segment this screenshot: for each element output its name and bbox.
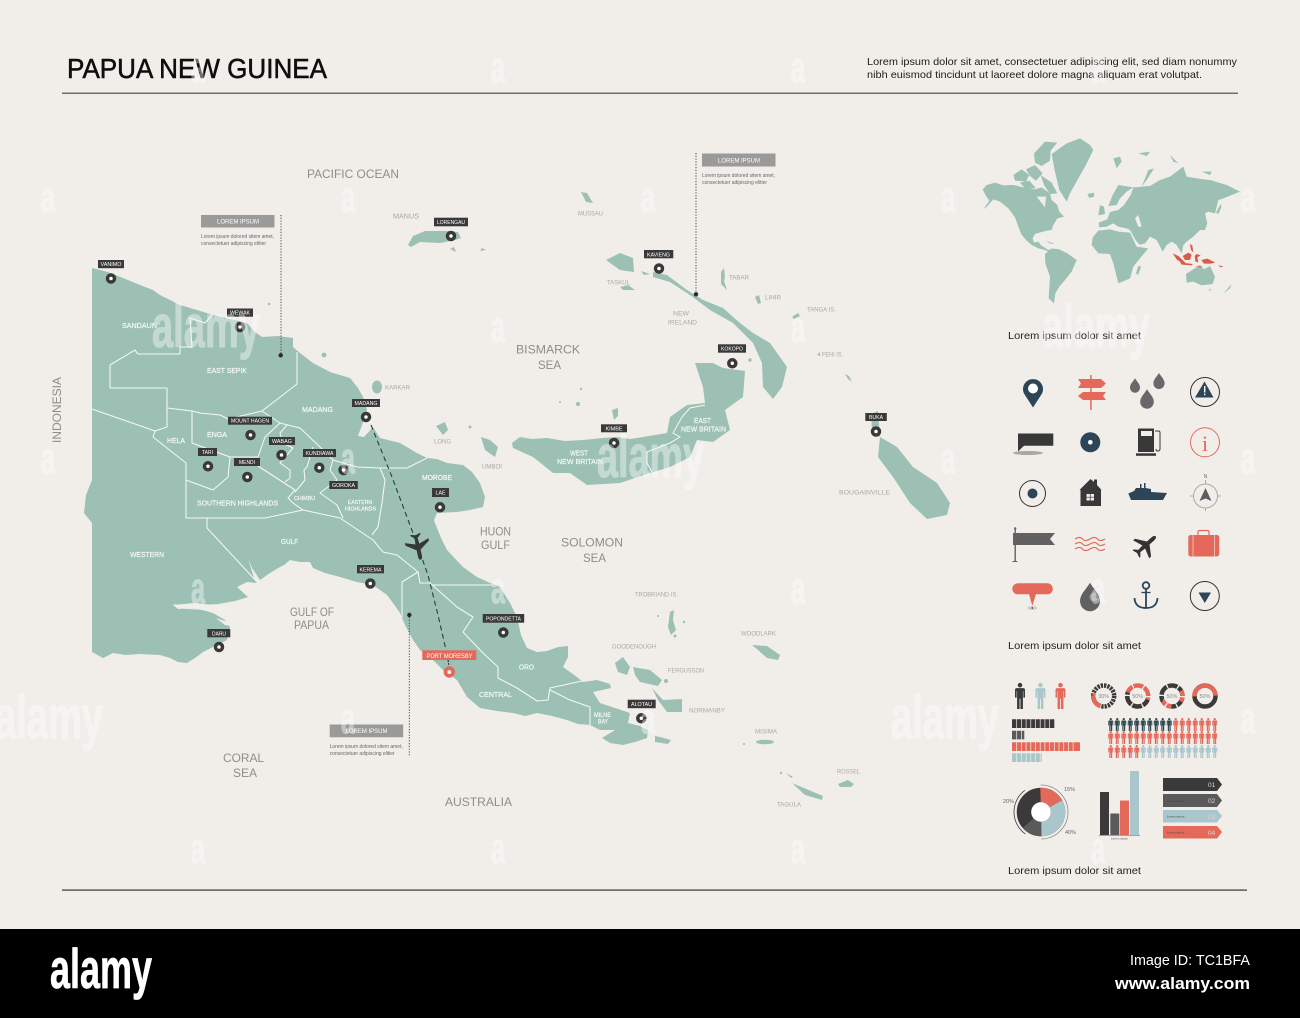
icon: red marker: [1012, 583, 1053, 610]
island labels: WOODLARK: [741, 630, 777, 638]
Buka: BUKA: [869, 415, 883, 421]
icon: flag: [1012, 527, 1055, 562]
sea and neighbour labels: INDONESIA: [50, 377, 64, 443]
Lorengau: [434, 218, 468, 240]
footer bar: [0, 929, 1300, 1018]
watermark: a: [491, 564, 505, 613]
mainland: [84, 268, 648, 745]
statistics panel: [1003, 682, 1222, 840]
caption: icons: Lorem ipsum dolor sit amet: [1008, 640, 1141, 652]
sea and neighbour labels: AUSTRALIA: [445, 795, 512, 809]
Tari: [198, 448, 217, 470]
icon: compass: N: [1204, 474, 1208, 480]
pie chart: 15%: [1064, 787, 1075, 793]
pie chart: [1003, 785, 1076, 839]
watermark: alamy: [891, 684, 999, 751]
island labels: UMBOI: [482, 464, 502, 470]
arrow list: Lorem ipsum: [1167, 814, 1185, 818]
island labels: GOODENOUGH: [612, 644, 656, 650]
callout: New Ireland: [694, 153, 776, 296]
donut: 50 percent red and dark: [1124, 683, 1151, 709]
icon: disc: [1080, 432, 1100, 452]
North America: [983, 183, 1064, 253]
plane on route: [403, 531, 432, 562]
Alotau: ALOTAU: [631, 702, 652, 708]
callout: East Sepik: [201, 215, 283, 357]
watermark: a: [41, 173, 55, 222]
people grid: [1108, 718, 1217, 758]
Madang: MADANG: [354, 401, 378, 407]
island labels: NORMANBY: [689, 708, 726, 714]
Lorengau: LORENGAU: [437, 220, 465, 226]
watermark: a: [941, 434, 955, 483]
island labels: FENI IS.: [822, 352, 843, 358]
watermark: a: [1241, 173, 1255, 222]
province labels: MILNE: [594, 713, 611, 719]
segmented bars: [1012, 718, 1080, 763]
arrow list: 03: [1208, 814, 1216, 821]
sea and neighbour labels: CORAL: [223, 751, 264, 765]
intro text: [867, 56, 1238, 81]
icon: oil drop: [1080, 583, 1100, 611]
Wewak: WEWAK: [230, 311, 250, 317]
icon: house: [1080, 479, 1102, 506]
Bougainville and Buka: [871, 411, 950, 519]
icon: plane: [1128, 527, 1164, 563]
sea and neighbour labels: SEA: [233, 766, 257, 780]
sea and neighbour labels: SEA: [583, 551, 606, 565]
footer bar: www.alamy.com: [1114, 974, 1250, 993]
province labels: GULF: [281, 539, 298, 546]
Port Moresby capital: [422, 650, 476, 676]
Goroka: [329, 466, 358, 489]
Buka: [865, 413, 887, 435]
Kavieng: KAVIENG: [647, 252, 670, 258]
island labels: MANUS: [393, 214, 419, 220]
caption: world map: Lorem ipsum dolor sit amet: [1008, 330, 1141, 342]
Australia: [1186, 265, 1215, 285]
watermark: a: [491, 824, 505, 873]
British Isles: [1098, 205, 1105, 215]
province labels: MADANG: [302, 407, 333, 414]
footer bar: alamy: [50, 937, 152, 1000]
sea and neighbour labels: SOLOMON: [561, 536, 623, 550]
island labels: LONG: [434, 438, 451, 446]
Arctic islands: [1113, 157, 1122, 168]
intro text: nibh euismod tincidunt ut laoreet dolore magna aliquam erat volutpat.: [867, 69, 1202, 81]
Wewak: [227, 308, 253, 330]
arrow list: Lorem ipsum: [1167, 830, 1185, 834]
watermark: alamy: [1042, 293, 1150, 360]
title: PAPUA NEW GUINEA: [67, 53, 328, 84]
Kokopo: KOKOPO: [721, 347, 744, 353]
province labels: NEW BRITAIN: [557, 459, 603, 466]
donut: 50 percent half: [1194, 685, 1216, 707]
Mendi: [234, 458, 260, 480]
island labels: TASKUL: [607, 280, 630, 286]
New Britain border: [647, 405, 705, 472]
arrow list: 04: [1208, 830, 1216, 837]
watermark: alamy: [152, 293, 260, 360]
Alotau: [628, 700, 656, 722]
Caribbean: [1046, 241, 1055, 244]
caption: statistics: Lorem ipsum dolor sit amet: [1008, 865, 1141, 877]
island labels: MUSSAU: [578, 210, 603, 218]
province labels: SOUTHERN HIGHLANDS: [197, 500, 278, 508]
province labels: ORO: [519, 664, 535, 672]
watermark: a: [341, 173, 355, 222]
Africa: [1092, 229, 1148, 283]
icon: fuel pump: [1136, 428, 1160, 456]
watermark: a: [791, 303, 805, 352]
sea and neighbour labels: PAPUA: [294, 618, 329, 632]
route: dashed flight path: [371, 425, 446, 650]
province borders: [92, 315, 590, 725]
watermark: a: [341, 694, 355, 743]
Mount Hagen: [228, 417, 272, 438]
Kerema: [357, 565, 384, 587]
Eurasia: [1099, 167, 1240, 253]
donut: 50 percent segmented: 50%: [1166, 694, 1178, 700]
pie chart: 40%: [1065, 830, 1076, 836]
callout: Central: LOREM IPSUM: [346, 728, 388, 735]
callout: Central: Lorem ipsum dolored sitem amet,: [330, 744, 403, 750]
New Ireland: [653, 272, 787, 399]
watermark: a: [1241, 434, 1255, 483]
Lae: LAE: [436, 490, 446, 496]
watermark: a: [641, 173, 655, 222]
callout: East Sepik: consectetuer adipiscing elitier: [201, 241, 266, 247]
pie chart: 20%: [1003, 799, 1014, 805]
icon: warning sign: [1190, 378, 1220, 406]
Port Moresby capital: PORT MORESBY: [426, 653, 473, 660]
Wabag: WABAG: [272, 439, 292, 445]
island labels: BOUGAINVILLE: [839, 490, 891, 496]
icon set: [1012, 373, 1221, 611]
watermark: a: [791, 564, 805, 613]
island labels: LIHIR: [765, 294, 781, 302]
people figures: [1015, 683, 1065, 709]
Madagascar: [1136, 266, 1141, 275]
Lae: [432, 488, 449, 511]
Wabag: [269, 437, 295, 458]
watermark: a: [791, 824, 805, 873]
Canadian arctic: [1013, 169, 1029, 182]
province labels: CENTRAL: [479, 692, 512, 699]
Daru: DARU: [212, 631, 226, 637]
province labels: HIGHLANDS: [345, 506, 376, 512]
icon: ship: [1128, 483, 1167, 500]
Kerema: KEREMA: [360, 567, 382, 573]
icon: anchor: [1134, 582, 1158, 608]
Japan: [1216, 204, 1221, 214]
callout: New Ireland: consectetuer adipiscing elitier: [702, 180, 767, 186]
sea and neighbour labels: PACIFIC OCEAN: [307, 167, 399, 181]
province labels: [122, 323, 726, 726]
highlighted region in red: [1173, 244, 1223, 267]
map of Papua New Guinea: [84, 192, 950, 800]
watermark: a: [491, 43, 505, 92]
province labels: HELA: [167, 438, 185, 445]
donut: 50 percent red and dark: 50%: [1132, 694, 1143, 700]
Kokopo: [718, 344, 746, 367]
donut: 30 percent: [1093, 686, 1114, 706]
callout: Central: consectetuer adipiscing elitier: [330, 751, 395, 757]
donut: 50 percent half: 50%: [1199, 694, 1211, 700]
New Britain: [512, 363, 745, 485]
Kimbe: [601, 424, 627, 446]
icon: down arrow: [1190, 582, 1219, 610]
Tari: TARI: [202, 450, 213, 456]
Kavieng: [644, 250, 673, 272]
intro text: Lorem ipsum dolor sit amet, consectetuer adipiscing elit, sed diam nonummy: [867, 56, 1238, 68]
bar chart: Lorem ipsum: [1111, 836, 1129, 840]
watermark: a: [191, 564, 205, 613]
Popondetta: [483, 614, 524, 636]
watermark: a: [641, 694, 655, 743]
island labels: [385, 210, 891, 808]
icon: compass: [1190, 474, 1221, 511]
watermark: [0, 43, 1255, 873]
island labels: KARKAR: [385, 384, 410, 392]
province labels: WESTERN: [130, 552, 164, 559]
province labels: MOROBE: [422, 475, 452, 482]
Mount Hagen: MOUNT HAGEN: [231, 419, 269, 425]
island labels: TABAR: [729, 274, 749, 282]
Vanimo: VANIMO: [100, 262, 122, 268]
Popondetta: POPONDETTA: [486, 616, 521, 622]
bar chart: [1099, 771, 1140, 840]
sea and neighbour labels: BISMARCK: [516, 342, 580, 356]
province labels: EAST: [694, 418, 712, 425]
capital and city markers: [98, 218, 887, 722]
South America: [1045, 248, 1077, 303]
Mendi: MENDI: [239, 460, 255, 466]
sea and neighbour labels: SEA: [538, 358, 561, 372]
world map: [983, 138, 1240, 303]
province labels: CHIMBU: [294, 496, 315, 502]
icon: waves: [1075, 538, 1105, 550]
watermark: a: [1091, 43, 1105, 92]
Daru: [207, 629, 230, 650]
watermark: a: [1241, 694, 1255, 743]
watermark: a: [791, 43, 805, 92]
Kundiawa: [303, 449, 336, 471]
Vanimo: [98, 260, 124, 282]
watermark: a: [1091, 564, 1105, 613]
province labels: EASTERN: [348, 500, 372, 506]
Iceland: [1087, 193, 1094, 198]
icon: suitcase: [1188, 530, 1219, 556]
arrow list: 02: [1208, 798, 1216, 805]
arrow list: Lorem ipsum: [1167, 799, 1185, 803]
Greenland: [1052, 138, 1093, 202]
arrow list: [1163, 778, 1222, 838]
callout: New Ireland: LOREM IPSUM: [718, 157, 760, 164]
Kimbe: KIMBE: [606, 426, 623, 432]
island labels: FERGUSSON: [668, 668, 704, 674]
province labels: EAST SEPIK: [207, 368, 247, 375]
icon: water drops: [1130, 373, 1165, 409]
Scandinavia: [1108, 185, 1133, 206]
island labels: TAGULA: [777, 802, 802, 808]
delta channels: [172, 587, 250, 628]
donut: 30 percent: 30%: [1098, 694, 1109, 700]
watermark: a: [191, 824, 205, 873]
watermark: a: [941, 173, 955, 222]
sea and neighbour labels: GULF: [481, 538, 510, 552]
New Zealand: [1223, 284, 1232, 293]
watermark: alamy: [0, 684, 103, 751]
callout: East Sepik: Lorem ipsum dolored sitem amet,: [201, 234, 274, 240]
sea and neighbour labels: [50, 167, 623, 809]
sea and neighbour labels: HUON: [480, 524, 511, 538]
donut: 50 percent segmented: [1158, 682, 1186, 710]
watermark: a: [491, 303, 505, 352]
sea and neighbour labels: GULF OF: [290, 605, 334, 619]
icon: information: i: [1202, 431, 1208, 456]
icon: information: [1190, 428, 1220, 457]
icon: target: [1020, 480, 1046, 506]
watermark: a: [41, 434, 55, 483]
island labels: IRELAND: [668, 320, 697, 326]
province labels: ENGA: [207, 432, 227, 439]
Madang: [352, 399, 380, 420]
callout: Central: [330, 613, 411, 757]
callout: New Ireland: Lorem ipsum dolored sitem amet,: [702, 173, 775, 179]
watermark: a: [341, 434, 355, 483]
footer bar: Image ID: TC1BFA: [1130, 952, 1250, 969]
island labels: NEW: [673, 310, 690, 318]
icon: location pin: [1023, 379, 1043, 408]
island labels: TROBRIAND IS.: [635, 592, 678, 598]
island labels: ROSSEL: [837, 768, 860, 776]
callout: East Sepik: LOREM IPSUM: [217, 218, 259, 226]
watermark: a: [1091, 824, 1105, 873]
arrow list: 01: [1208, 782, 1216, 789]
island labels: TANGA IS.: [807, 306, 836, 314]
icon: signpost: [1078, 375, 1106, 410]
Goroka: GOROKA: [332, 483, 355, 489]
island labels: MISIMA: [755, 728, 778, 736]
province labels: WEST: [570, 450, 589, 458]
watermark: alamy: [597, 423, 704, 490]
watermark: a: [191, 43, 205, 92]
province labels: BAY: [598, 720, 608, 726]
province labels: NEW BRITAIN: [681, 426, 726, 434]
small islands: [268, 192, 854, 800]
Kundiawa: KUNDIAWA: [306, 451, 334, 457]
New Hanover: [606, 253, 634, 272]
province labels: SANDAUN: [122, 323, 157, 330]
icon: speech bubble: [1013, 434, 1053, 455]
